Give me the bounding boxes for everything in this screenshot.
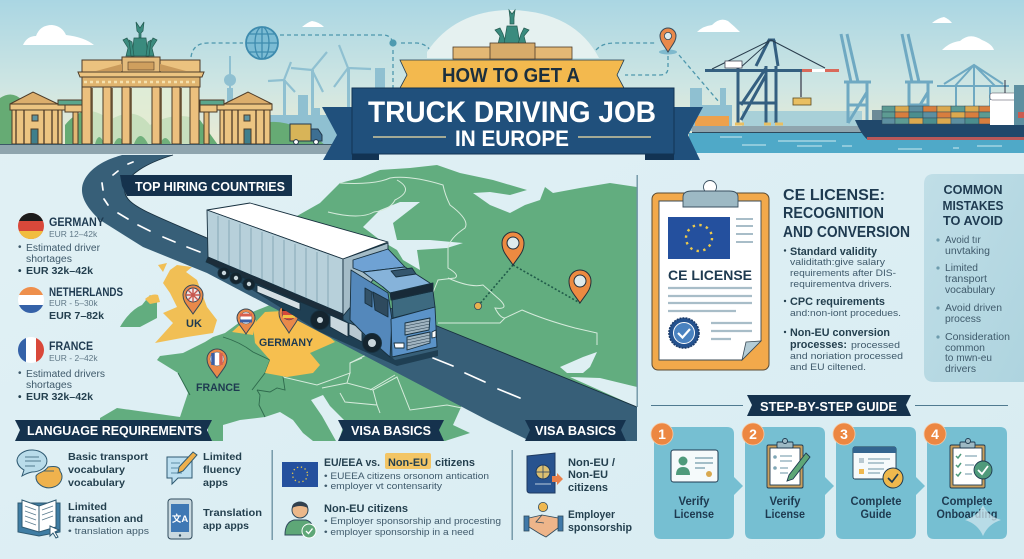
text: translation app: app apps xyxy=(203,520,249,532)
paper xyxy=(659,201,761,360)
step 1 card: License xyxy=(674,509,714,521)
icon: Brandenburg Gate xyxy=(10,22,272,144)
panel: step-by-step guide xyxy=(651,395,1008,539)
text: Germany: EUR 32k–42k xyxy=(26,265,93,277)
panel: CE license document xyxy=(652,180,769,370)
distant port buildings xyxy=(690,88,862,131)
icon: phone translate xyxy=(168,499,192,539)
step 2 card: License xyxy=(765,509,805,521)
text: Non-EU / citizens xyxy=(568,457,615,494)
text: France: EUR - 2–42k xyxy=(49,353,98,363)
heading: CE LICENSE: xyxy=(783,187,885,204)
cab front xyxy=(391,307,437,357)
text: Germany: Estimated driver xyxy=(26,243,101,254)
icon: small gate on title xyxy=(453,10,572,59)
heading: visa basics right: VISA BASICS xyxy=(535,423,616,438)
cab roof fairing xyxy=(353,249,405,272)
heading xyxy=(942,182,1004,228)
icon: open book xyxy=(18,500,60,538)
clip xyxy=(683,180,738,207)
cab side steps xyxy=(330,315,348,337)
text: EU/EEA vs Non-EU xyxy=(324,453,489,492)
text: France: shortages xyxy=(26,380,72,391)
text: Non-EU / citizens: Non-EU / xyxy=(568,457,615,469)
icon: container ship xyxy=(855,80,1024,140)
icon: phone translate: 文A xyxy=(172,513,188,525)
UK xyxy=(145,263,217,343)
icon: person with check xyxy=(285,502,316,538)
panel: CE recognition text xyxy=(783,187,910,373)
bullet: CPC requirements: CPC requirements xyxy=(790,296,885,308)
bullet: non-EU conversion: Non-EU conversion xyxy=(790,327,890,339)
landmass xyxy=(100,165,637,441)
icon: note and pencil xyxy=(167,452,197,484)
title banner xyxy=(322,60,703,160)
map pin: east 1 xyxy=(502,232,524,265)
text: limited translation: • translation apps xyxy=(68,526,149,537)
container xyxy=(207,203,388,259)
text: Germany: • xyxy=(18,242,22,253)
heading: RECOGNITION xyxy=(783,205,884,222)
heading: visa basics xyxy=(338,420,444,441)
icon: EU flag xyxy=(282,462,318,487)
dark borders France/Italy xyxy=(178,337,285,417)
heading: language requirements xyxy=(15,420,212,441)
text: France: Estimated drivers xyxy=(26,369,105,380)
text: EU/EEA vs Non-EU: citizens xyxy=(435,457,475,469)
step 1 card: Verify xyxy=(678,496,710,508)
text: translation app: Translation xyxy=(203,507,262,519)
text: Netherlands: EUR - 5–30k xyxy=(49,298,98,308)
bullet: CPC requirements: and:non-iont procedues. xyxy=(790,308,901,319)
step 2 card: Verify xyxy=(770,496,801,508)
step 2 card xyxy=(742,423,834,539)
route dots xyxy=(478,265,580,306)
seas xyxy=(311,202,637,441)
left ribbon tail xyxy=(322,107,352,160)
icon: browser window check xyxy=(853,447,903,488)
text: limited fluency: Limited xyxy=(203,451,242,463)
heading: visa basics: VISA BASICS xyxy=(351,423,431,438)
map labels: FRANCE xyxy=(196,382,240,394)
title banner: HOW TO GET A xyxy=(442,65,580,87)
panel: language requirements xyxy=(15,420,262,539)
bullet: CPC requirements xyxy=(784,296,901,319)
green hills xyxy=(0,94,325,145)
step 1 card xyxy=(651,423,743,539)
heading xyxy=(783,187,910,241)
text: France: EUR 32k–42k xyxy=(26,391,93,403)
text: Non-EU citizens: • Employer sponsorship and procesting xyxy=(324,516,501,527)
text: Germany: shortages xyxy=(26,254,72,265)
icon: seal check xyxy=(669,318,699,348)
step 3 card: Complete xyxy=(850,496,902,508)
water xyxy=(689,133,1024,153)
map labels: GERMANY xyxy=(259,337,314,349)
text: France: • xyxy=(18,392,22,403)
text: EU/EEA vs Non-EU: • EUEEA citizens orsonom antication xyxy=(324,471,489,482)
flag: Germany xyxy=(18,213,44,239)
cab wheel xyxy=(362,334,382,352)
bullets: Avoid driven xyxy=(945,303,1002,314)
text: basic transport xyxy=(68,451,149,489)
windshield xyxy=(392,291,435,318)
icon: handshake xyxy=(524,502,563,537)
Ireland xyxy=(120,295,157,327)
flag: France xyxy=(18,337,44,363)
step 4 card: 4 xyxy=(931,426,939,442)
icon: main crane xyxy=(705,40,839,124)
icon: truck xyxy=(206,203,438,366)
step 1 card: 1 xyxy=(658,426,666,442)
step 2 card: 2 xyxy=(749,426,757,442)
bullets: common xyxy=(945,343,985,354)
text: France: FRANCE xyxy=(49,341,93,353)
bullet: non-EU conversion: and noriation processed xyxy=(790,351,903,362)
text: translation app xyxy=(203,507,262,532)
bullet: standard validity: requirementva drivers. xyxy=(790,279,892,290)
text: Employer sponsorship: Employer xyxy=(568,509,616,521)
bullet: standard validity: validitath:give salary xyxy=(790,257,885,268)
text: Germany: GERMANY xyxy=(49,217,104,229)
bullets: Limited xyxy=(945,263,978,274)
text: Employer sponsorship: sponsorship xyxy=(568,522,632,534)
step 3 card: Guide xyxy=(860,509,892,521)
map pin: France xyxy=(207,349,227,378)
step 3 card: 3 xyxy=(840,426,848,442)
heading: TO AVOID xyxy=(943,213,1003,228)
chassis xyxy=(206,257,343,320)
dome behind title xyxy=(427,10,599,58)
borders xyxy=(283,177,597,413)
text: Germany: • xyxy=(18,266,22,277)
bullet: standard validity: Standard validity xyxy=(790,246,878,258)
top ribbon xyxy=(400,60,624,88)
step 4 card xyxy=(924,423,1007,539)
bullets: unvtaking xyxy=(945,246,990,257)
panel: CE license document: CE LICENSE xyxy=(668,267,752,283)
bullet: non-EU conversion xyxy=(784,327,903,373)
text: limited fluency xyxy=(203,451,242,489)
text: limited fluency: apps xyxy=(203,477,228,489)
panel: visa basics right xyxy=(524,420,632,537)
bullet: non-EU conversion: processed xyxy=(851,340,900,351)
panel: top hiring countries xyxy=(18,175,292,403)
heading: step-by-step xyxy=(747,395,911,416)
arch openings xyxy=(91,88,190,144)
road xyxy=(82,155,637,441)
map pin: Netherlands xyxy=(237,309,255,334)
text: Non-EU / citizens: citizens xyxy=(568,482,608,494)
map pin: east 2 xyxy=(569,270,591,303)
text: EU/EEA vs Non-EU: Non-EU xyxy=(388,457,428,469)
bullet: non-EU conversion: processes: xyxy=(790,339,847,351)
text: basic transport: vocabulary xyxy=(68,464,125,476)
icon: clipboard pencil xyxy=(767,438,810,488)
bullets: to mwn-eu xyxy=(945,353,992,364)
text: EU/EEA vs Non-EU: • employer vt contensarity xyxy=(324,481,442,492)
icon: globe xyxy=(246,27,278,59)
title banner: IN EUROPE xyxy=(455,126,569,151)
street strip xyxy=(0,144,340,146)
bullet: non-EU conversion: and EU ciltened. xyxy=(790,362,866,373)
text: Netherlands: NETHERLANDS xyxy=(49,287,123,299)
heading: language requirements: LANGUAGE REQUIREMENTS xyxy=(27,423,202,438)
text: Netherlands: EUR 7–82k xyxy=(49,310,104,322)
text: limited translation: Limited xyxy=(68,501,107,513)
bullets: transport xyxy=(945,274,987,285)
icon: map pin header xyxy=(659,28,677,54)
text: basic transport: Basic transport xyxy=(68,451,149,463)
text: limited fluency: fluency xyxy=(203,464,241,476)
vertical divider xyxy=(636,175,638,407)
icon: small truck xyxy=(290,124,322,144)
heading: COMMON xyxy=(944,182,1002,197)
bullets: vocabulary xyxy=(945,285,995,296)
blue panel xyxy=(352,88,674,154)
bullets xyxy=(936,235,1010,375)
step 4 card: Onboarding xyxy=(936,509,998,521)
text: France: • xyxy=(18,368,22,379)
text: France xyxy=(18,341,105,403)
dashed routes xyxy=(191,35,719,102)
right ribbon tail xyxy=(674,107,703,160)
quay xyxy=(692,126,862,133)
icon: far cranes xyxy=(841,34,1009,123)
flag: Netherlands xyxy=(18,287,44,313)
step 3 card xyxy=(833,423,925,539)
map pin: UK xyxy=(183,285,203,314)
bullets: process xyxy=(945,314,981,325)
heading: top hiring countries xyxy=(120,175,292,196)
step 4 card: Complete xyxy=(942,496,992,508)
text: limited translation: transation and xyxy=(68,513,143,525)
text: Non-EU citizens: Non-EU citizens xyxy=(324,503,408,515)
icon: checklist clipboard xyxy=(950,438,992,488)
heading: top hiring countries: TOP HIRING COUNTRIES xyxy=(135,180,285,194)
left pavilion xyxy=(10,92,58,104)
road shadow xyxy=(207,262,438,366)
clouds xyxy=(23,17,994,50)
map labels xyxy=(186,318,314,394)
header scene xyxy=(0,0,1024,154)
quadriga statue xyxy=(123,22,157,56)
text: basic transport: vocabulary xyxy=(68,477,125,489)
bullets: drivers xyxy=(945,364,976,375)
trailer wheels xyxy=(218,267,330,330)
cab side xyxy=(350,270,392,357)
panel: common mistakes xyxy=(924,174,1024,382)
heading: MISTAKES xyxy=(942,198,1004,213)
icon: EU flag large xyxy=(668,217,730,259)
title banner: TRUCK DRIVING JOB xyxy=(368,96,656,129)
bullets: Avoid tır xyxy=(945,235,981,246)
text: EU/EEA vs Non-EU: EU/EEA vs. xyxy=(324,457,380,469)
sky xyxy=(0,0,1024,146)
bullet: standard validity: requirements after DIS- xyxy=(790,268,896,279)
Germany and Netherlands highlight xyxy=(232,310,335,377)
text: Non-EU citizens xyxy=(324,503,501,538)
icon: speech bubbles xyxy=(17,450,62,488)
heading: step-by-step: STEP-BY-STEP GUIDE xyxy=(760,399,897,414)
text: Non-EU citizens: • employer sponsorship in a need xyxy=(324,527,474,538)
map pin: Germany xyxy=(279,303,299,333)
text: limited translation xyxy=(68,501,149,537)
text: Germany xyxy=(18,217,104,277)
text: Netherlands xyxy=(49,287,123,322)
map labels: UK xyxy=(186,318,202,330)
bullets: Consideration xyxy=(945,332,1010,343)
bullet: standard validity xyxy=(784,246,896,290)
icon: ID card xyxy=(671,450,718,482)
text: Non-EU / citizens: Non-EU xyxy=(568,469,608,481)
heading: AND CONVERSION xyxy=(783,224,910,241)
text: Employer sponsorship xyxy=(568,509,632,534)
panel: visa basics left xyxy=(282,420,501,538)
text: Germany: EUR 12–42k xyxy=(49,229,98,239)
icon: passport xyxy=(527,453,563,493)
right pavilion xyxy=(224,92,272,104)
map of Europe xyxy=(82,155,637,441)
distant skyline and wind turbines xyxy=(224,45,385,145)
